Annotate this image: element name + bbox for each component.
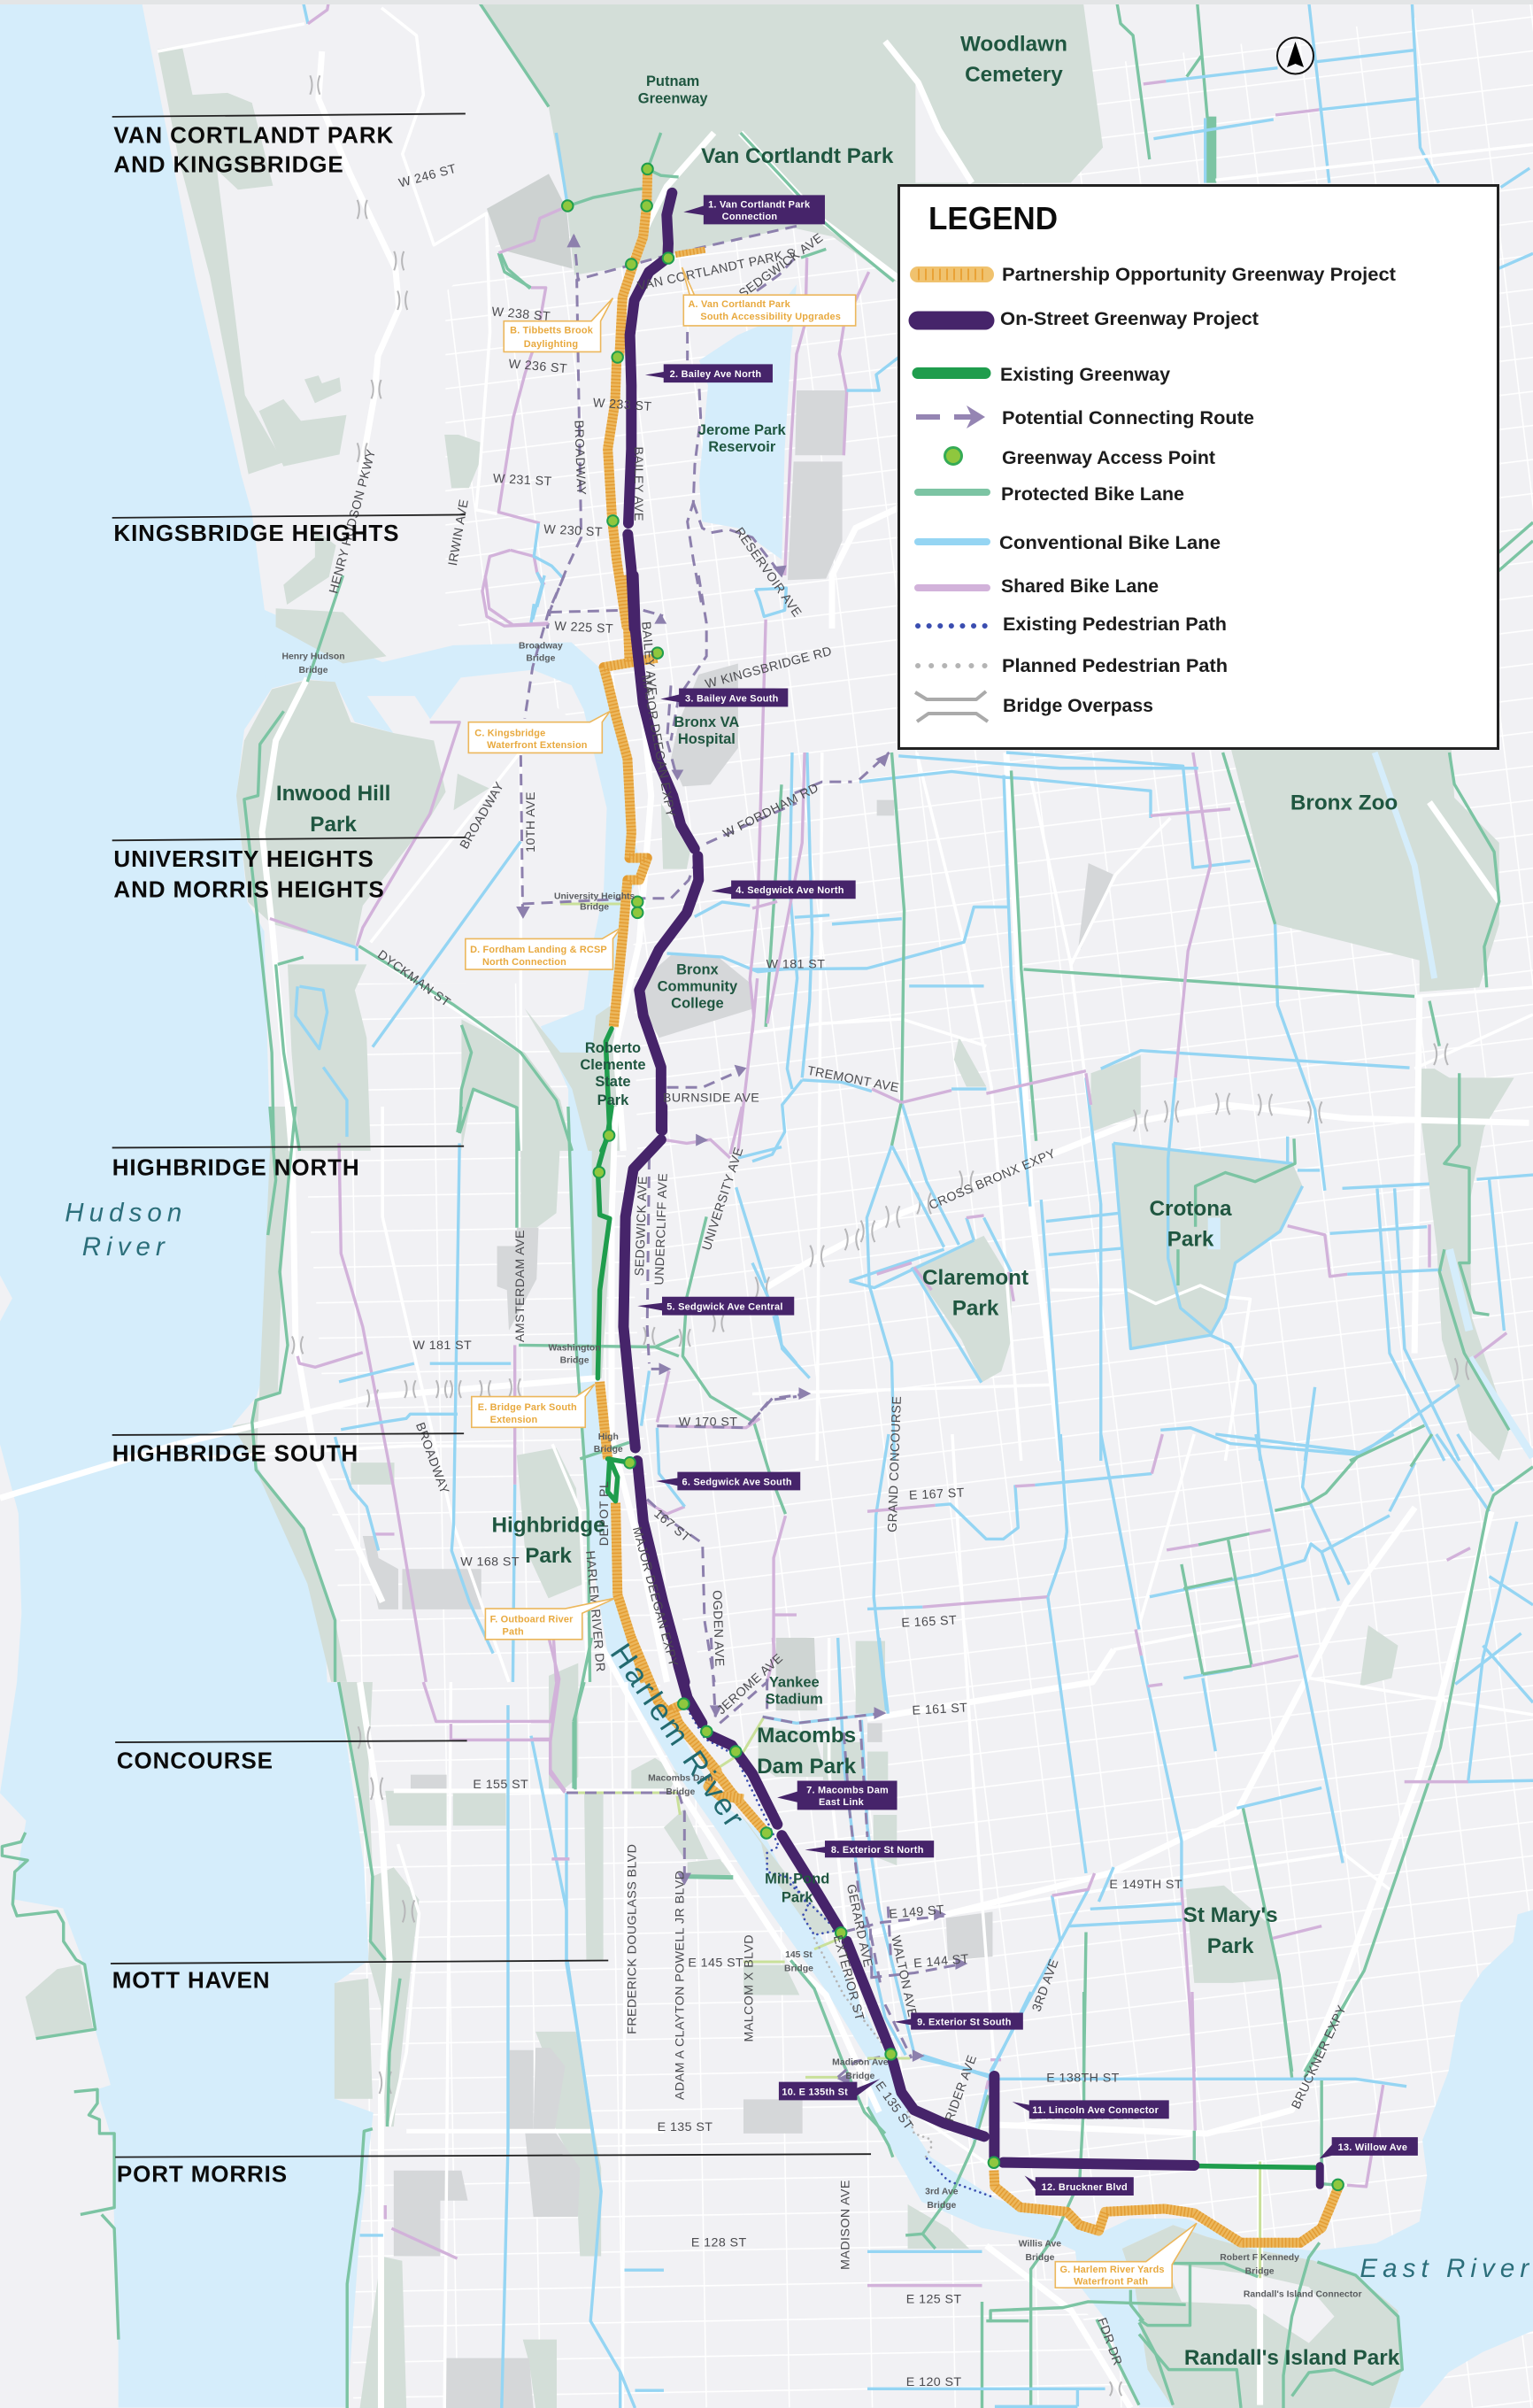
street labels: IRWIN AVE	[446, 498, 472, 567]
park and landmark labels: Crotona	[1149, 1197, 1232, 1221]
callout 2: Bailey Ave North	[645, 364, 773, 382]
street labels: BROADWAY	[571, 420, 588, 496]
street labels: W 181 ST	[766, 957, 825, 971]
bridge labels: Bridge	[594, 1445, 623, 1455]
bridge labels	[281, 641, 1362, 2300]
street labels: 3RD AVE	[1029, 1957, 1062, 2014]
street labels: W 170 ST	[679, 1416, 737, 1430]
section heading: University Heights and Morris Heights: AND MORRIS HEIGHTS	[113, 876, 385, 903]
park and landmark labels: Park	[952, 1297, 999, 1321]
street labels: W 181 ST	[412, 1339, 472, 1353]
callout 7: Macombs Dam East Link	[777, 1780, 897, 1810]
section heading: Port Morris: PORT MORRIS	[117, 2160, 288, 2187]
water: Jerome Park Reservoir and small lakes	[649, 133, 797, 560]
legend item: protected bike lane: Protected Bike Lane	[1001, 484, 1184, 505]
street labels: BAILEY AVE	[631, 446, 645, 521]
park and landmark labels: Park	[525, 1544, 572, 1568]
callout C: Kingsbridge Waterfront Extension: Waterfront Extension	[487, 740, 588, 751]
street labels: E 145 ST	[688, 1956, 743, 1970]
top edge band	[0, 0, 1533, 4]
callout 4: Sedgwick Ave North: 4. Sedgwick Ave North	[736, 885, 844, 896]
bridge labels: University Heights	[554, 891, 636, 901]
water labels: East River	[1360, 2254, 1533, 2283]
bike lanes Washington Heights	[252, 1107, 797, 1682]
park and landmark labels: State	[595, 1074, 631, 1090]
St Mary's Park	[1186, 1625, 1398, 1983]
park and landmark labels: Park	[1207, 1934, 1254, 1958]
callout 1: Van Cortlandt Park Connection: Connection	[722, 212, 777, 222]
callout B: Tibbetts Brook Daylighting: Daylighting	[524, 339, 578, 350]
route: existing greenway (green)	[597, 1029, 1315, 2167]
callout B: Tibbetts Brook Daylighting: B. Tibbetts Brook	[510, 326, 594, 336]
street labels: RESERVOIR AVE	[732, 525, 804, 620]
section heading: Mott Haven	[111, 1960, 608, 1994]
Inwood Hill Park and Manhattan parks	[236, 608, 690, 1151]
route: on-street greenway project (purple)	[623, 193, 1320, 2185]
water labels: River	[82, 1232, 170, 1262]
park and landmark labels: Bronx	[676, 961, 720, 977]
bridge labels: Bridge	[299, 666, 328, 675]
legend item: planned pedestrian path: Planned Pedestrian Path	[1002, 656, 1228, 676]
roads west Harlem	[360, 1682, 664, 2408]
bridge labels: 3rd Ave	[925, 2187, 959, 2196]
Bronx Zoo, Crotona Park, Claremont Park	[912, 716, 1514, 1461]
bridge labels: High	[598, 1432, 619, 1442]
park and landmark labels: Dam Park	[757, 1755, 857, 1779]
street labels: OGDEN AVE	[709, 1590, 727, 1667]
greenway routes	[597, 171, 1338, 2242]
street labels: DEPOT PL	[597, 1481, 612, 1546]
roads Port Morris	[910, 1992, 1352, 2408]
callout 4: Sedgwick Ave North	[712, 880, 856, 899]
callout E: Bridge Park South Extension: Extension	[490, 1415, 537, 1425]
bike lanes Van Cortlandt	[482, 133, 903, 629]
bike lanes Bronx centre	[752, 752, 1533, 1461]
street labels: W KINGSBRIDGE RD	[704, 644, 834, 691]
street labels: E 128 ST	[691, 2235, 747, 2250]
street labels: 10TH AVE	[524, 791, 538, 853]
water labels: Hudson	[65, 1199, 187, 1228]
park and landmark labels: Stadium	[766, 1692, 823, 1708]
callout C: Kingsbridge Waterfront Extension: C. Kingsbridge	[474, 728, 545, 738]
section heading: Van Cortlandt Park and Kingsbridge: VAN CORTLANDT PARK	[113, 121, 394, 148]
park and landmark labels: Randall's Island Park	[1184, 2346, 1400, 2370]
roads Bronx	[752, 752, 1533, 1461]
park and landmark labels: St Mary's	[1183, 1903, 1278, 1927]
street labels: E 138TH ST	[1046, 2072, 1120, 2086]
legend item: partnership opportunity: Partnership Opportunity Greenway Project	[1002, 265, 1396, 285]
bridge labels: Bridge	[927, 2201, 957, 2211]
street labels: W 225 ST	[554, 620, 613, 637]
legend item: potential connecting route	[916, 405, 1254, 428]
Randall's Island land	[908, 2204, 1402, 2408]
park and landmark labels: Highbridge	[492, 1513, 605, 1537]
street labels: 167 ST	[651, 1507, 693, 1545]
callout F: Outboard River Path: F. Outboard River	[490, 1615, 574, 1625]
section heading: Kingsbridge Heights: KINGSBRIDGE HEIGHTS	[113, 520, 399, 546]
park and landmark labels: Van Cortlandt Park	[701, 144, 894, 168]
street labels: E 125 ST	[906, 2293, 962, 2307]
park and landmark labels: Park	[1167, 1227, 1214, 1251]
callout 9: Exterior St South	[894, 2013, 1023, 2030]
street labels: FREDERICK DOUGLASS BLVD	[625, 1844, 639, 2034]
legend item: bridge overpass: Bridge Overpass	[1003, 696, 1153, 716]
street labels: CROSS BRONX EXPY	[927, 1146, 1058, 1213]
bridge labels: Bridge	[526, 653, 556, 663]
roads Washington Heights	[177, 1107, 667, 1682]
callout 7: Macombs Dam East Link: East Link	[819, 1797, 865, 1808]
callout 8: Exterior St North	[805, 1841, 934, 1857]
callout E: Bridge Park South Extension	[472, 1385, 595, 1427]
street labels: JEROME AVE	[714, 1651, 786, 1717]
bridge labels: Randall's Island Connector	[1244, 2290, 1362, 2300]
roads Harlem River Drive	[602, 1638, 879, 2112]
street labels: GRAND CONCOURSE	[886, 1395, 905, 1532]
callout 6: Sedgwick Ave South: 6. Sedgwick Ave South	[682, 1477, 792, 1487]
bridge labels: Bridge	[666, 1787, 696, 1797]
street labels: AMSTERDAM AVE	[513, 1230, 528, 1342]
bike lanes South Bronx	[867, 1434, 1533, 2072]
street labels: MALCOM X BLVD	[742, 1934, 756, 2042]
park and landmark labels: Hospital	[678, 731, 736, 747]
legend item: greenway access point: Greenway Access Point	[1002, 448, 1215, 468]
bike lanes Inwood	[244, 575, 797, 1151]
park and landmark labels: Reservoir	[708, 439, 776, 455]
park and landmark labels: Inwood Hill	[276, 782, 390, 806]
park and landmark labels	[276, 32, 1400, 2370]
bridge labels: Macombs Dam	[648, 1773, 713, 1783]
callout 1: Van Cortlandt Park Connection	[683, 195, 825, 224]
Yankee Stadium, Macombs Dam and Mill Pond parks	[549, 1638, 897, 1995]
section heading: University Heights and Morris Heights: UNIVERSITY HEIGHTS	[113, 845, 374, 872]
water labels	[65, 1199, 1533, 2283]
bike lanes west Harlem	[2, 1682, 664, 2408]
street labels	[327, 162, 1350, 2389]
bridge labels: Bridge	[580, 902, 609, 912]
street labels: W 230 ST	[543, 522, 603, 540]
callout 10: E 135th St: 10. E 135th St	[782, 2087, 848, 2097]
street labels: BURNSIDE AVE	[663, 1091, 759, 1105]
bike lanes Port Morris and Randall's Island	[867, 1992, 1406, 2408]
street labels: E 165 ST	[901, 1614, 958, 1631]
park and landmark labels: Claremont	[922, 1266, 1028, 1290]
street labels: E 144 ST	[913, 1952, 969, 1971]
park and landmark labels: Roberto	[585, 1040, 641, 1056]
access points	[562, 164, 1344, 2190]
legend item: bridge overpass	[915, 691, 1153, 722]
bridge labels: Robert F Kennedy	[1220, 2253, 1299, 2263]
street labels: BRUCKNER BLVD	[1030, 2108, 1142, 2122]
callout 10: E 135th St	[779, 2079, 880, 2100]
callout G: Harlem River Yards Waterfront Path: Waterfront Path	[1074, 2277, 1148, 2288]
callout 12: Bruckner Blvd	[1025, 2175, 1134, 2196]
bridge labels: Broadway	[519, 641, 563, 651]
section heading: Van Cortlandt Park and Kingsbridge: AND KINGSBRIDGE	[113, 150, 344, 177]
section heading: Port Morris	[115, 2154, 871, 2187]
street labels: W FORDHAM RD	[721, 781, 821, 841]
callout 13: Willow Ave	[1320, 2137, 1418, 2158]
street labels: W 233 ST	[592, 396, 652, 414]
route: partnership opportunity greenway project (orange)	[600, 171, 1338, 2242]
street labels: DYCKMAN ST	[374, 948, 453, 1010]
legend item: shared bike lane: Shared Bike Lane	[1001, 576, 1159, 597]
bridge labels: Bridge	[784, 1964, 813, 1974]
roads Inwood and Major Deegan	[262, 671, 651, 1151]
park and landmark labels: Park	[782, 1890, 813, 1906]
street labels: E 135 ST	[872, 2080, 915, 2133]
bridge labels: Bridge	[1025, 2253, 1055, 2263]
callout F: Outboard River Path	[485, 1598, 616, 1640]
section heading: Kingsbridge Heights	[112, 514, 466, 546]
street labels: GERARD AVE	[844, 1883, 874, 1969]
street labels: ADAM A CLAYTON POWELL JR BLVD	[673, 1871, 687, 2100]
park and landmark labels: Bronx Zoo	[1290, 791, 1398, 815]
street labels: E 167 ST	[909, 1486, 965, 1503]
callout B: Tibbetts Brook Daylighting	[504, 298, 612, 351]
section heading: Highbridge South: HIGHBRIDGE SOUTH	[112, 1439, 358, 1466]
callout 3: Bailey Ave South	[660, 689, 788, 706]
callout 11: Lincoln Ave Connector	[1013, 2100, 1169, 2119]
callout A: South Accessibility Upgrades: A. Van Cortlandt Park	[689, 299, 791, 310]
callout 3: Bailey Ave South: 3. Bailey Ave South	[685, 693, 779, 704]
section heading: University Heights and Morris Heights	[112, 837, 466, 903]
street labels: FDR DR	[1094, 2316, 1124, 2367]
callout 9: Exterior St South: 9. Exterior St South	[917, 2017, 1012, 2027]
park and landmark labels: Woodlawn	[960, 32, 1067, 56]
street labels: E 155 ST	[473, 1778, 528, 1792]
bridge labels: Bridge	[845, 2072, 875, 2081]
section heading: Mott Haven: MOTT HAVEN	[112, 1967, 270, 1994]
bridge labels: Bridge	[1245, 2267, 1275, 2277]
callout 7: Macombs Dam East Link: 7. Macombs Dam	[806, 1785, 889, 1795]
street labels: TREMONT AVE	[806, 1064, 900, 1096]
street labels: W 168 ST	[460, 1555, 520, 1569]
street labels: BROADWAY	[412, 1421, 451, 1496]
legend item: existing pedestrian path: Existing Pedestrian Path	[1003, 614, 1227, 635]
street labels: W 246 ST	[397, 162, 458, 191]
bridge labels: Willis Ave	[1019, 2239, 1061, 2249]
park and landmark labels: Clemente	[580, 1057, 646, 1073]
bridge labels: 145 St	[785, 1950, 813, 1960]
callout 12: Bruckner Blvd: 12. Bruckner Blvd	[1042, 2182, 1128, 2193]
bridge labels: Bridge	[560, 1355, 589, 1365]
north arrow	[1277, 37, 1313, 74]
bike lanes Harlem River south	[531, 1638, 991, 2134]
street labels: BROADWAY	[458, 779, 507, 852]
street labels: RIDER AVE	[943, 2053, 980, 2124]
street labels: W 238 ST	[491, 305, 551, 324]
bike lanes north-east	[885, 0, 1533, 188]
callout A: South Accessibility Upgrades: South Accessibility Upgrades	[700, 312, 841, 322]
park and landmark labels: College	[671, 995, 724, 1011]
water labels: Harlem River	[604, 1638, 752, 1836]
callout D: Fordham Landing and RCSP North Connection: North Connection	[482, 957, 566, 968]
callout G: Harlem River Yards Waterfront Path	[1055, 2223, 1197, 2288]
street labels: UNIVERSITY AVE	[700, 1146, 747, 1253]
street labels: MADISON AVE	[839, 2180, 853, 2270]
street labels: UNDERCLIFF AVE	[652, 1173, 671, 1285]
callout 1: Van Cortlandt Park Connection: 1. Van Cortlandt Park	[708, 199, 811, 210]
callout 8: Exterior St North: 8. Exterior St North	[831, 1845, 924, 1856]
legend title: LEGEND	[928, 200, 1058, 236]
bike lanes east of legend	[898, 253, 1533, 768]
George Washington Bridge approach	[0, 1444, 177, 1498]
legend item: conventional bike lane: Conventional Bike Lane	[999, 533, 1221, 553]
potential route arrowheads	[516, 234, 967, 2085]
bridge labels: Madison Ave	[832, 2058, 889, 2068]
legend item: existing greenway: Existing Greenway	[1000, 365, 1170, 385]
roads north-west	[158, 8, 497, 513]
legend panel	[899, 186, 1498, 749]
section heading: Van Cortlandt Park and Kingsbridge	[112, 113, 466, 177]
callout 11: Lincoln Ave Connector: 11. Lincoln Ave Connector	[1032, 2105, 1159, 2116]
roads South Bronx	[867, 1434, 1533, 2072]
street labels: HARLEM RIVER DR	[582, 1550, 607, 1672]
callout 5: Sedgwick Ave Central: 5. Sedgwick Ave Central	[666, 1302, 783, 1313]
street labels: W 236 ST	[508, 357, 568, 376]
park and landmark labels: Putnam	[646, 73, 699, 89]
street labels: MAJOR DEEGAN EXPY	[638, 674, 677, 819]
Van Cortlandt Park and Woodlawn Cemetery	[476, 0, 1103, 282]
park and landmark labels: Macombs	[757, 1724, 856, 1748]
Bronx River and Crotona lake	[1208, 752, 1533, 1457]
street labels: E 149TH ST	[1109, 1878, 1182, 1892]
section heading: Concourse: CONCOURSE	[117, 1748, 273, 1774]
bike lanes north-west	[303, 0, 549, 289]
street labels: W 231 ST	[493, 472, 552, 489]
street labels: BRUCKNER EXPY	[1289, 2003, 1350, 2111]
bridge overpass marks	[292, 75, 1468, 2396]
park and landmark labels: Park	[310, 813, 357, 837]
callout C: Kingsbridge Waterfront Extension	[468, 712, 610, 752]
callout D: Fordham Landing and RCSP North Connection: D. Fordham Landing & RCSP	[470, 945, 607, 955]
park and landmark labels: Bronx VA	[674, 714, 739, 730]
callout F: Outboard River Path: Path	[503, 1627, 524, 1638]
callout G: Harlem River Yards Waterfront Path: G. Harlem River Yards	[1059, 2265, 1165, 2275]
bridge labels: Henry Hudson	[281, 652, 345, 662]
legend item: potential connecting route: Potential Connecting Route	[1002, 408, 1254, 428]
park and landmark labels: Jerome Park	[698, 422, 787, 438]
street labels: WALTON AVE	[888, 1934, 920, 2018]
street labels: BAILEY AVE	[638, 621, 659, 697]
callout 6: Sedgwick Ave South	[656, 1472, 800, 1490]
street labels: E 135 ST	[658, 2120, 713, 2134]
callout E: Bridge Park South Extension: E. Bridge Park South	[478, 1402, 577, 1413]
section heading: Highbridge North: HIGHBRIDGE NORTH	[112, 1154, 360, 1181]
callout D: Fordham Landing and RCSP North Connection	[466, 928, 620, 969]
callout 2: Bailey Ave North: 2. Bailey Ave North	[670, 369, 761, 380]
park and landmark labels: Cemetery	[965, 63, 1063, 87]
Highbridge Park	[232, 1107, 612, 1682]
roads Van Cortlandt	[631, 133, 903, 629]
parks north-west Riverdale	[158, 45, 481, 605]
callout 13: Willow Ave: 13. Willow Ave	[1338, 2142, 1407, 2153]
grey institutional blocks	[363, 174, 1113, 2408]
street labels: SEDGWICK AVE	[633, 1176, 651, 1277]
callout A: South Accessibility Upgrades	[682, 267, 856, 326]
park and landmark labels: Greenway	[638, 90, 708, 106]
park and landmark labels: Mill Pond	[765, 1872, 829, 1887]
legend item: on-street greenway: On-Street Greenway Project	[1000, 309, 1259, 329]
callout 5: Sedgwick Ave Central	[637, 1297, 794, 1316]
Manhattan waterfront parks	[26, 1682, 604, 2408]
street labels: SEDGWICK AVE	[736, 231, 826, 301]
street labels: E 161 ST	[912, 1701, 968, 1718]
street labels: HENRY HUDSON PKWY	[327, 448, 379, 595]
bridge labels: Washington	[548, 1344, 601, 1354]
street labels: VAN CORTLANDT PARK S	[636, 246, 797, 294]
street labels: EXTERIOR ST	[830, 1933, 867, 2022]
park and landmark labels: Yankee	[769, 1675, 820, 1691]
street labels: MAJOR DEEGAN EXPY	[629, 1525, 681, 1669]
park and landmark labels: Park	[597, 1092, 629, 1108]
street labels: E 120 ST	[906, 2375, 962, 2389]
street labels: E 149 ST	[889, 1902, 945, 1922]
park and landmark labels: Community	[658, 978, 738, 994]
